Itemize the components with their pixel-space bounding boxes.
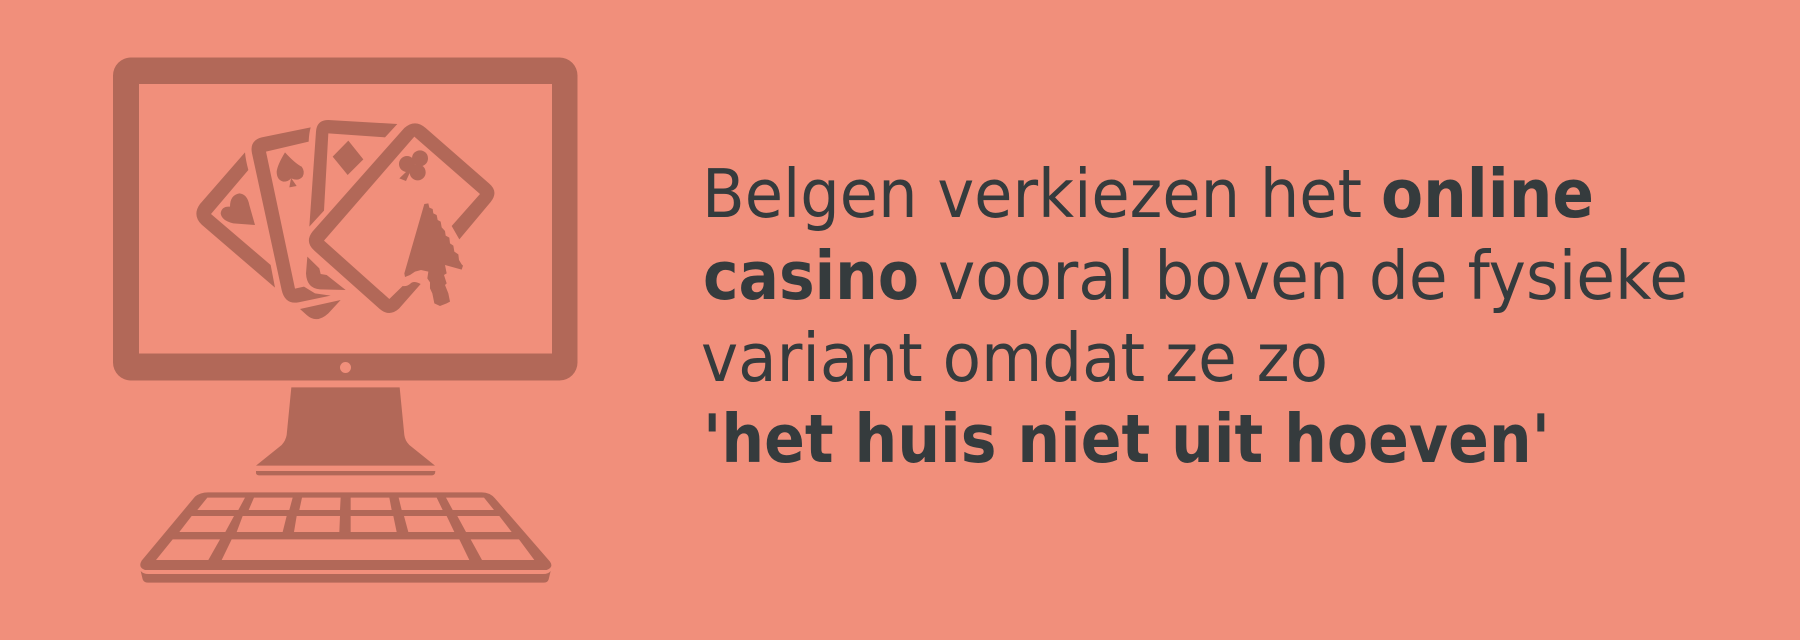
monitor stand xyxy=(140,387,551,583)
monitor frame xyxy=(113,58,578,380)
card: clubs xyxy=(309,123,494,313)
line 1: online xyxy=(1381,155,1594,233)
power button xyxy=(340,362,351,373)
line 4: 'het huis niet uit hoeven' xyxy=(703,400,1550,478)
icon: desktop computer with playing cards xyxy=(113,58,578,583)
card: hearts xyxy=(196,152,275,288)
keyboard xyxy=(140,492,551,583)
card: diamonds xyxy=(306,120,397,290)
line 3: variant omdat ze zo xyxy=(701,319,1328,397)
icon: pointer cursor xyxy=(404,203,463,306)
icon: playing cards xyxy=(196,120,494,319)
monitor xyxy=(113,58,578,380)
line 1: Belgen verkiezen het xyxy=(702,155,1362,233)
line 2: vooral boven de fysieke xyxy=(938,237,1688,315)
text block: main statement xyxy=(701,155,1688,478)
card: spades xyxy=(252,127,341,319)
line 2: casino xyxy=(703,237,919,315)
